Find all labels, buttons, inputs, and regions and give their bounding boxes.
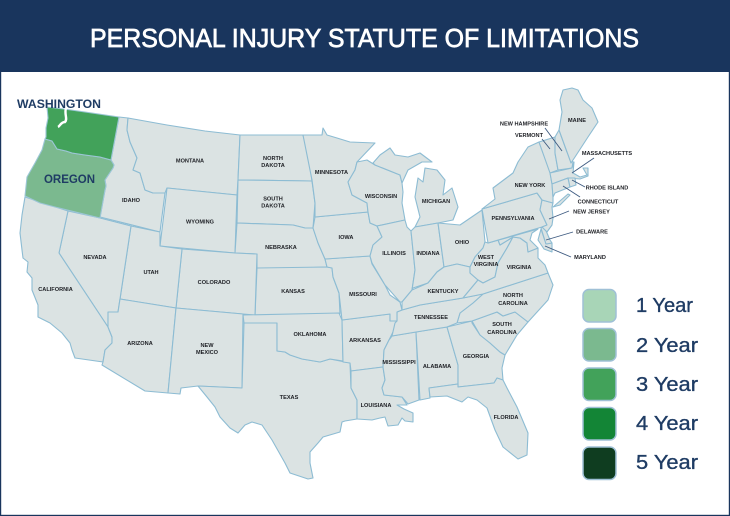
state name labels: WEST xyxy=(478,255,495,261)
legend item: 3 Year: 3 Year xyxy=(636,374,698,396)
state name labels: GEORGIA xyxy=(463,354,489,360)
state: Missouri xyxy=(325,256,402,321)
state: Louisiana xyxy=(351,367,413,426)
state name labels: PENNSYLVANIA xyxy=(492,216,534,222)
state name labels: RHODE ISLAND xyxy=(586,186,628,192)
state name labels: NEW JERSEY xyxy=(573,210,610,216)
legend item: 1 Year xyxy=(583,290,693,322)
state: Arizona xyxy=(102,299,176,393)
state: Massachusetts xyxy=(550,162,588,184)
legend item: 2 Year: 2 Year xyxy=(636,335,698,357)
state name labels: MISSISSIPPI xyxy=(382,360,416,366)
legend item: 5 Year: 5 Year xyxy=(636,452,698,474)
state name labels: ARIZONA xyxy=(127,341,153,347)
state name labels: NEW xyxy=(200,343,214,349)
state name labels: NORTH xyxy=(263,156,283,162)
state: California xyxy=(20,197,112,362)
state name labels: TENNESSEE xyxy=(414,315,448,321)
state name labels: NORTH xyxy=(503,293,523,299)
state name labels: MINNESOTA xyxy=(315,170,348,176)
state name labels: DAKOTA xyxy=(261,163,285,169)
state: Connecticut xyxy=(552,178,570,197)
US map xyxy=(20,88,598,479)
state: West Virginia xyxy=(470,237,513,283)
state name labels: NEW YORK xyxy=(515,183,545,189)
state: Nebraska xyxy=(235,223,327,268)
state: Maryland xyxy=(488,229,538,252)
state name labels: NEW HAMPSHIRE xyxy=(500,122,548,128)
state: New Hampshire xyxy=(555,130,573,170)
state name labels: ARKANSAS xyxy=(349,338,381,344)
state: Utah xyxy=(120,226,182,308)
state: Illinois xyxy=(370,220,415,302)
state name labels: ILLINOIS xyxy=(382,251,406,257)
state: Nevada xyxy=(59,211,131,327)
state: Mississippi xyxy=(382,332,419,404)
state name labels: SOUTH xyxy=(492,322,512,328)
state: New Mexico xyxy=(168,308,243,394)
state: Oregon xyxy=(25,139,114,218)
state name labels: NEVADA xyxy=(83,255,107,261)
state: Georgia xyxy=(447,321,505,387)
state: Arkansas xyxy=(342,314,397,371)
label: Oregon: OREGON xyxy=(44,174,95,186)
state name labels: OHIO xyxy=(455,240,470,246)
state name labels: VERMONT xyxy=(515,133,544,139)
state: Maryland eastern shore xyxy=(538,229,552,252)
state: Florida xyxy=(429,378,528,459)
state name labels: VIRGINIA xyxy=(507,265,531,271)
state name labels: WYOMING xyxy=(186,220,214,226)
state name labels: CAROLINA xyxy=(498,301,528,307)
state: New Jersey xyxy=(540,200,553,232)
state: Kansas xyxy=(255,267,340,315)
state: Wisconsin xyxy=(348,160,405,226)
state name labels: INDIANA xyxy=(416,251,440,257)
state: Oklahoma xyxy=(243,313,343,362)
state: Wyoming xyxy=(160,188,237,253)
state name labels: CAROLINA xyxy=(487,330,517,336)
state name labels: SOUTH xyxy=(263,196,283,202)
state name labels: MARYLAND xyxy=(574,255,606,261)
state: Maine xyxy=(559,88,598,163)
state: Washington xyxy=(45,107,119,160)
state name labels: MICHIGAN xyxy=(422,199,450,205)
state name labels: ALABAMA xyxy=(423,364,451,370)
legend item: 4 Year xyxy=(583,408,698,440)
state name labels: MASSACHUSETTS xyxy=(582,151,632,157)
header banner xyxy=(0,0,730,72)
state name labels: OKLAHOMA xyxy=(294,332,326,338)
state name labels: CONNECTICUT xyxy=(578,200,619,206)
state: Minnesota xyxy=(303,128,375,217)
state: Kentucky xyxy=(402,264,478,310)
state name labels xyxy=(38,118,632,421)
state: North Carolina xyxy=(457,273,553,323)
state: New York xyxy=(482,142,553,209)
state name labels: VIRGINIA xyxy=(474,262,498,268)
state name labels: CALIFORNIA xyxy=(38,287,73,293)
state: Ohio xyxy=(438,210,485,267)
legend item: 1 Year: 1 Year xyxy=(636,295,693,317)
state name labels: MONTANA xyxy=(176,158,204,164)
state name labels: NEBRASKA xyxy=(265,245,297,251)
state: Rhode Island xyxy=(568,178,576,187)
state name labels: FLORIDA xyxy=(494,415,518,421)
state: Montana xyxy=(127,118,240,195)
state name labels: COLORADO xyxy=(198,280,231,286)
state: Vermont xyxy=(539,137,558,173)
legend xyxy=(583,290,698,480)
state: Pennsylvania xyxy=(482,193,547,243)
state: South Carolina xyxy=(472,312,528,355)
state: Tennessee xyxy=(392,294,483,336)
state: Virginia xyxy=(463,237,548,298)
state name labels: TEXAS xyxy=(280,395,299,401)
label: Washington: WASHINGTON xyxy=(17,99,101,111)
state name labels: WISCONSIN xyxy=(365,194,397,200)
legend item: 3 Year xyxy=(583,368,698,400)
state: Alabama xyxy=(416,327,458,400)
state: Michigan lower peninsula xyxy=(415,168,458,227)
state name labels: IOWA xyxy=(339,235,353,241)
state name labels: KANSAS xyxy=(281,289,305,295)
state: Colorado xyxy=(176,249,257,315)
state name labels: MEXICO xyxy=(196,350,219,356)
state name labels: KENTUCKY xyxy=(427,289,459,295)
legend item: 4 Year: 4 Year xyxy=(636,413,698,435)
state name labels: LOUISIANA xyxy=(361,403,391,409)
state: Texas xyxy=(198,323,357,479)
state: Delaware xyxy=(541,226,552,244)
state: Indiana xyxy=(411,223,444,290)
state: Iowa xyxy=(313,212,382,259)
Puget Sound inlet xyxy=(58,108,66,127)
leader lines for northeast states xyxy=(542,128,594,257)
state name labels: UTAH xyxy=(143,270,159,276)
state name labels: MISSOURI xyxy=(349,292,377,298)
state: Michigan upper peninsula xyxy=(373,148,432,183)
legend item: 5 Year xyxy=(583,447,698,480)
state: Idaho xyxy=(100,117,165,232)
title: PERSONAL INJURY STATUTE OF LIMITATIONS xyxy=(90,23,639,53)
legend item: 2 Year xyxy=(583,328,698,361)
state: South Dakota xyxy=(237,180,315,228)
state name labels: MAINE xyxy=(568,118,586,124)
state name labels: DAKOTA xyxy=(261,204,285,210)
state name labels: IDAHO xyxy=(122,198,141,204)
state: Long Island xyxy=(553,194,570,207)
state name labels: DELAWARE xyxy=(576,230,608,236)
state: North Dakota xyxy=(238,135,312,181)
